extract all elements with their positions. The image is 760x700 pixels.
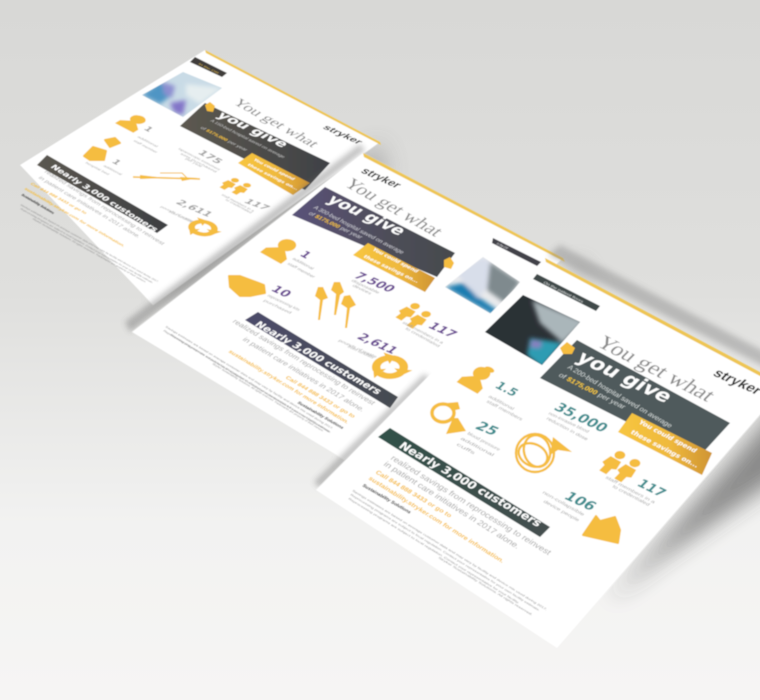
stat: 175: per year xyxy=(184,158,204,168)
stat: 1 staff xyxy=(132,125,159,154)
sheet 2 title: you give xyxy=(323,192,410,238)
sheet 3 header panel xyxy=(540,340,730,458)
stat: 117: 117 xyxy=(241,198,272,212)
sheet 1 fine print: Savings estimates are based on average customer data and may vary by facility and device mix used during 2017. xyxy=(19,204,160,283)
sheet 2 tag: In the OR xyxy=(495,242,510,250)
stat: 35,000: reduction in dose xyxy=(545,416,590,442)
sheet 2 title xyxy=(306,175,448,284)
stat: 117: to credentialed xyxy=(224,199,253,214)
stat: 1.5 staff: staff members xyxy=(485,399,525,423)
stat: 10: reprocessing kits xyxy=(266,294,302,312)
sheet 3 fine print xyxy=(347,489,549,616)
sheet 3 fine print: Savings estimates are based on average customer data and may vary by facility and device mix used during 2017. xyxy=(351,489,549,611)
sheet 3 tag xyxy=(533,274,600,311)
sheet 3 photo xyxy=(484,294,580,366)
sheet 1 title: You could spend xyxy=(251,158,296,181)
sheet 2 fine print: Stryker Sustainability Solutions. All rights reserved. Trademarks are property of their owners. xyxy=(211,362,325,433)
stat: 2,611: pounds of waste xyxy=(337,339,379,359)
sheet 2 logo: stryker xyxy=(358,166,405,190)
stat: 1 staff: staff member xyxy=(132,140,159,154)
stat: 175: laparoscopic instrument xyxy=(177,148,221,171)
sheet 1 customers text: Nearly 3,000 customers xyxy=(48,163,161,233)
sheet 1 corner marker xyxy=(205,102,215,112)
icon: surgical tool xyxy=(133,173,200,181)
icon: recycle xyxy=(179,215,230,244)
sheet 3 corner marker xyxy=(560,342,575,354)
sheet 1 customers text: Call 844 888 3433 or go to xyxy=(29,182,89,215)
sheet 2 fine print xyxy=(162,325,335,434)
sheet 3 tag: On the patient floors xyxy=(542,281,584,304)
stat: 175: 175 xyxy=(195,149,224,166)
sheet 2 tag xyxy=(492,238,547,269)
sheet 3 callout box xyxy=(618,413,712,475)
stat: 1.5 staff xyxy=(485,379,525,423)
icon: recycle xyxy=(360,348,422,389)
stat: 1 staff member: 1 xyxy=(297,248,315,261)
sheet 1 title: You get what xyxy=(229,97,323,150)
stat: 25: additional xyxy=(459,436,495,458)
sheet 3 title: You could spend xyxy=(636,418,699,454)
sheet 3 title: these savings on... xyxy=(629,429,701,469)
sheet 3 title xyxy=(557,331,722,469)
sheet 1 customers text: Sustainability Solutions xyxy=(20,194,55,214)
sheet 2 customers text: Call 844 888 3433 or go to xyxy=(283,376,357,419)
stat: 117 xyxy=(604,475,669,508)
sheet 3 customers text: Call 844 888 3433 or go to xyxy=(374,470,453,519)
icon: tubing coil xyxy=(515,432,572,472)
sheet 1 customers text: in patient care initiatives in 2017 alone. xyxy=(36,176,142,239)
stat: 117: staff members in a xyxy=(220,194,256,213)
sheet 1 paper xyxy=(20,50,380,305)
icon: staff person xyxy=(260,235,303,264)
stat: 106: 106 xyxy=(560,490,599,514)
stat: 2,611: from landfills xyxy=(167,211,193,223)
sheet 2 customers text: sustainability.stryker.com for more information. xyxy=(226,350,350,425)
sheet 1 customers text: realized savings from reprocessing to reinvest xyxy=(42,170,166,246)
sheet 2 title: these savings on... xyxy=(361,255,420,284)
sheet 2 customers text xyxy=(226,318,384,430)
sheet 3 title: A 200-bed hospital saved on average xyxy=(566,363,675,429)
sheet 3 customers text: in patient care initiatives in 2017 alone. xyxy=(382,460,522,550)
sheet 3 customers text: Sustainability Solutions xyxy=(361,483,413,515)
sheet 2 fine print: Reprocessing programs are subject to local regulation. Contact your representative for your own facility estimate. xyxy=(169,333,333,434)
stat: 25: 25 xyxy=(471,420,502,438)
icon: drape pack xyxy=(229,276,265,296)
stat: 1.5 staff: additional xyxy=(487,394,515,412)
sheet 1 photo xyxy=(142,72,222,118)
stat: 1.5 staff: 1.5 xyxy=(492,379,522,399)
sheet 1 title: you give xyxy=(213,110,292,150)
sheet 3 customers text xyxy=(361,439,554,565)
sheet 1 tag: In the OR xyxy=(197,63,221,75)
sheet 2 fine print: Reprocessing programs are subject to local regulation. Contact your representative for your own facility estimate. xyxy=(162,329,332,434)
sheet 1 customers bar xyxy=(37,155,168,233)
sheet 3 title: you give xyxy=(572,347,678,407)
sheet 1 fine print: Reprocessing programs are subject to local regulation. Contact your representative for your own facility estimate. xyxy=(19,208,155,284)
icon: bag xyxy=(84,138,120,160)
sheet 2 paper xyxy=(132,153,563,460)
panel: sheet 3, green edition xyxy=(314,245,760,648)
sheet 3 fine print: Stryker Sustainability Solutions. All rights reserved. xyxy=(437,556,534,616)
sheet 3 top strip xyxy=(545,258,760,392)
sheet 2 corner marker xyxy=(444,257,454,269)
stat: 1 device: additional xyxy=(102,165,123,176)
sheet 2 fine print: Savings estimates are based on average customer data and may vary by facility and device mix used during 2017. xyxy=(164,325,335,430)
sheet 2 callout box xyxy=(353,243,435,292)
stat: 117 xyxy=(401,320,461,348)
stat: 25: blood pressure xyxy=(466,431,502,452)
sheet 2 customers bar xyxy=(245,312,398,408)
sheet 2 title: of $175,000 per year xyxy=(306,211,364,240)
sheet 2 title: You get what xyxy=(339,175,448,240)
stat: 2,611 xyxy=(159,198,216,223)
stat: 1 staff: 1 xyxy=(141,125,155,134)
stat: 10: purchased xyxy=(262,299,294,315)
sheet 3 customers bar xyxy=(378,428,550,537)
stat: 1 device xyxy=(84,158,123,176)
stat: 106 xyxy=(541,490,599,523)
sheet 2 top strip xyxy=(363,153,565,262)
stat: 35,000: 35,000 xyxy=(550,401,611,435)
icon: nurses xyxy=(596,448,645,484)
stat: 106: non-collapsible xyxy=(541,490,586,518)
stat: 175: sets purchased xyxy=(179,153,218,173)
stat: 2,611: from landfills xyxy=(346,345,376,360)
sheet 2 customers text: Sustainability Solutions xyxy=(296,401,346,430)
stat: 35,000: non-invasive blood xyxy=(547,411,591,434)
stat: 117: 117 xyxy=(425,320,461,340)
stat: 10 xyxy=(262,283,302,315)
stat: 1 staff member: staff member xyxy=(286,262,317,279)
stat: 117: to credentialed xyxy=(611,484,651,508)
sheet 3 paper xyxy=(316,258,760,648)
stat: 117: 117 xyxy=(633,477,669,500)
sheet 1 callout box xyxy=(238,153,310,195)
stat: 117: to credentialed xyxy=(404,327,442,348)
stat: 2,611: 2,611 xyxy=(173,198,216,218)
sheet 1 customers text: sustainability.stryker.com for more information. xyxy=(23,187,126,248)
sheet 3 customers text: realized savings from reprocessing to reinvest xyxy=(389,454,554,557)
stat: 2,611 xyxy=(337,331,402,360)
panel: sheet 1, grey edition xyxy=(19,50,390,305)
sheet 3 customers text: Nearly 3,000 customers xyxy=(396,439,545,529)
sheet 3 title: You get what xyxy=(592,331,722,406)
sheet 2 title: A 300-bed hospital saved on average xyxy=(311,205,406,255)
sheet 3 fine print: Reprocessing programs are subject to local regulation. Contact your representative for your own facility estimate. xyxy=(349,493,541,612)
icon: three tools xyxy=(315,282,356,328)
sheet 1 top strip xyxy=(205,50,381,145)
stat: 7,500: disposable xyxy=(350,279,382,295)
stat: 2,611: 2,611 xyxy=(354,331,402,356)
stat: 7,500: 7,500 xyxy=(351,270,399,294)
icon: box xyxy=(583,516,620,543)
stat: 1 staff: additional xyxy=(136,136,159,148)
stat: 7,500: devices xyxy=(351,284,374,296)
sheet 1 title xyxy=(198,97,323,191)
stat: 1 device: hospital bed xyxy=(84,162,110,176)
sheet 1 title: A 150-bed hospital saved on average xyxy=(208,119,287,159)
icon: staff person xyxy=(457,360,499,394)
sheet 3 fine print: Reprocessing programs are subject to local regulation. Contact your representative for your facility. xyxy=(347,497,521,605)
sheet 3 title: of $175,000 per year xyxy=(557,371,628,411)
sheet 1 header panel xyxy=(180,103,330,190)
sheet 2 photo xyxy=(445,257,520,314)
icon: nurses xyxy=(392,300,435,330)
stat: 117 xyxy=(220,194,272,214)
icon: nurses xyxy=(217,176,254,196)
sheet 1 fine print: Stryker Sustainability Solutions. All rights reserved. Trademarks are property of their owners. xyxy=(31,218,148,283)
stat: 1 staff member xyxy=(286,248,317,279)
stat: 106: device people xyxy=(542,499,581,523)
sheet 2 customers text: Nearly 3,000 customers xyxy=(252,320,384,396)
sheet 1 logo: stryker xyxy=(320,124,365,146)
stat: 10: 10 xyxy=(268,283,295,300)
stat: 117: staff members in a xyxy=(401,321,446,345)
sheet 2 title: You could spend xyxy=(370,247,420,274)
stat: 1 device: 1 xyxy=(109,158,123,167)
stat: 1 staff member: additional xyxy=(291,257,315,270)
icon: staff person xyxy=(115,112,152,133)
sheet 1 title: these savings on... xyxy=(245,163,300,191)
sheet 2 customers text: in patient care initiatives in 2017 alone. xyxy=(240,336,367,413)
sheet 1 tag xyxy=(190,57,227,77)
stat: 117: staff members in a xyxy=(604,475,657,505)
panel: sheet 2, purple edition xyxy=(125,144,600,470)
stat: 2,611: pounds of waste xyxy=(159,206,195,223)
sheet 2 header panel xyxy=(292,187,455,277)
icon: cable bundle xyxy=(432,402,466,434)
sheet 3 customers text: sustainability.stryker.com for more information. xyxy=(367,476,506,565)
sheet 1 title: of $175,000 per year xyxy=(198,126,249,152)
sheet 2 customers text: realized savings from reprocessing to reinvest xyxy=(230,318,378,407)
stat: 25: cuffs xyxy=(455,442,477,456)
stat: 25 xyxy=(455,420,502,458)
